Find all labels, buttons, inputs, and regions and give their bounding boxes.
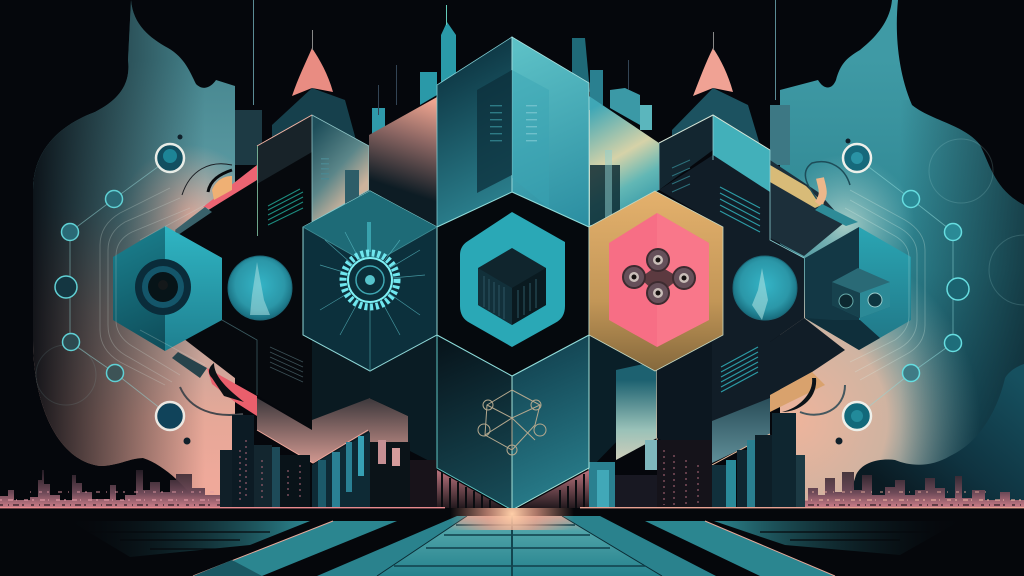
teal rounded hexagon xyxy=(460,212,565,347)
node: ring bottom xyxy=(156,402,184,430)
horizon line and ground xyxy=(0,507,1024,576)
icon: metal block xyxy=(832,268,890,318)
faint background circles xyxy=(36,139,1024,405)
left cube hexagon with camera lens xyxy=(113,226,222,351)
lower left panel box xyxy=(222,320,437,465)
icon: wire network xyxy=(478,390,546,455)
nodes: small rings xyxy=(55,190,124,382)
icon: glowing gear xyxy=(320,222,425,335)
central black hexagon xyxy=(437,192,589,376)
gold strip lower right xyxy=(770,372,845,415)
circuit lines left xyxy=(100,188,205,385)
circuit lines right xyxy=(845,190,925,380)
pink strip lower left xyxy=(172,352,257,416)
icon: dark cube xyxy=(478,248,546,325)
node: small dots xyxy=(178,134,190,444)
left organic blob xyxy=(33,0,235,495)
pink strip upper left xyxy=(175,164,257,235)
upper left panel box xyxy=(175,97,437,430)
right node network xyxy=(836,138,969,444)
back city towers xyxy=(235,0,790,165)
skyline left near xyxy=(220,415,437,508)
node: ring bottom right xyxy=(843,402,871,430)
nodes: small rings right xyxy=(902,190,969,382)
left node network xyxy=(55,134,190,444)
right organic blob xyxy=(780,0,1024,510)
central road xyxy=(317,508,716,576)
lower right panel box xyxy=(589,320,770,470)
gear hexagon panel xyxy=(303,191,437,371)
skyline right far xyxy=(795,472,1024,508)
icon: four lens rings xyxy=(623,249,695,304)
node: ring top xyxy=(156,144,184,172)
icon: camera lens xyxy=(135,259,191,315)
central top box xyxy=(437,37,589,227)
gold pink hexagon xyxy=(589,191,723,371)
ground stripes left xyxy=(70,521,397,576)
right side panel boxes xyxy=(589,96,858,463)
node: ring top right xyxy=(843,144,871,172)
central bottom box xyxy=(437,335,589,510)
ground stripes right xyxy=(645,521,960,576)
streaks under central box xyxy=(437,470,589,512)
right cube hexagon with block xyxy=(805,227,911,350)
skyline right near xyxy=(589,413,805,508)
node: dots right xyxy=(836,138,850,444)
left sphere xyxy=(228,256,292,320)
skyline left far xyxy=(0,470,232,508)
right sphere xyxy=(733,256,797,320)
